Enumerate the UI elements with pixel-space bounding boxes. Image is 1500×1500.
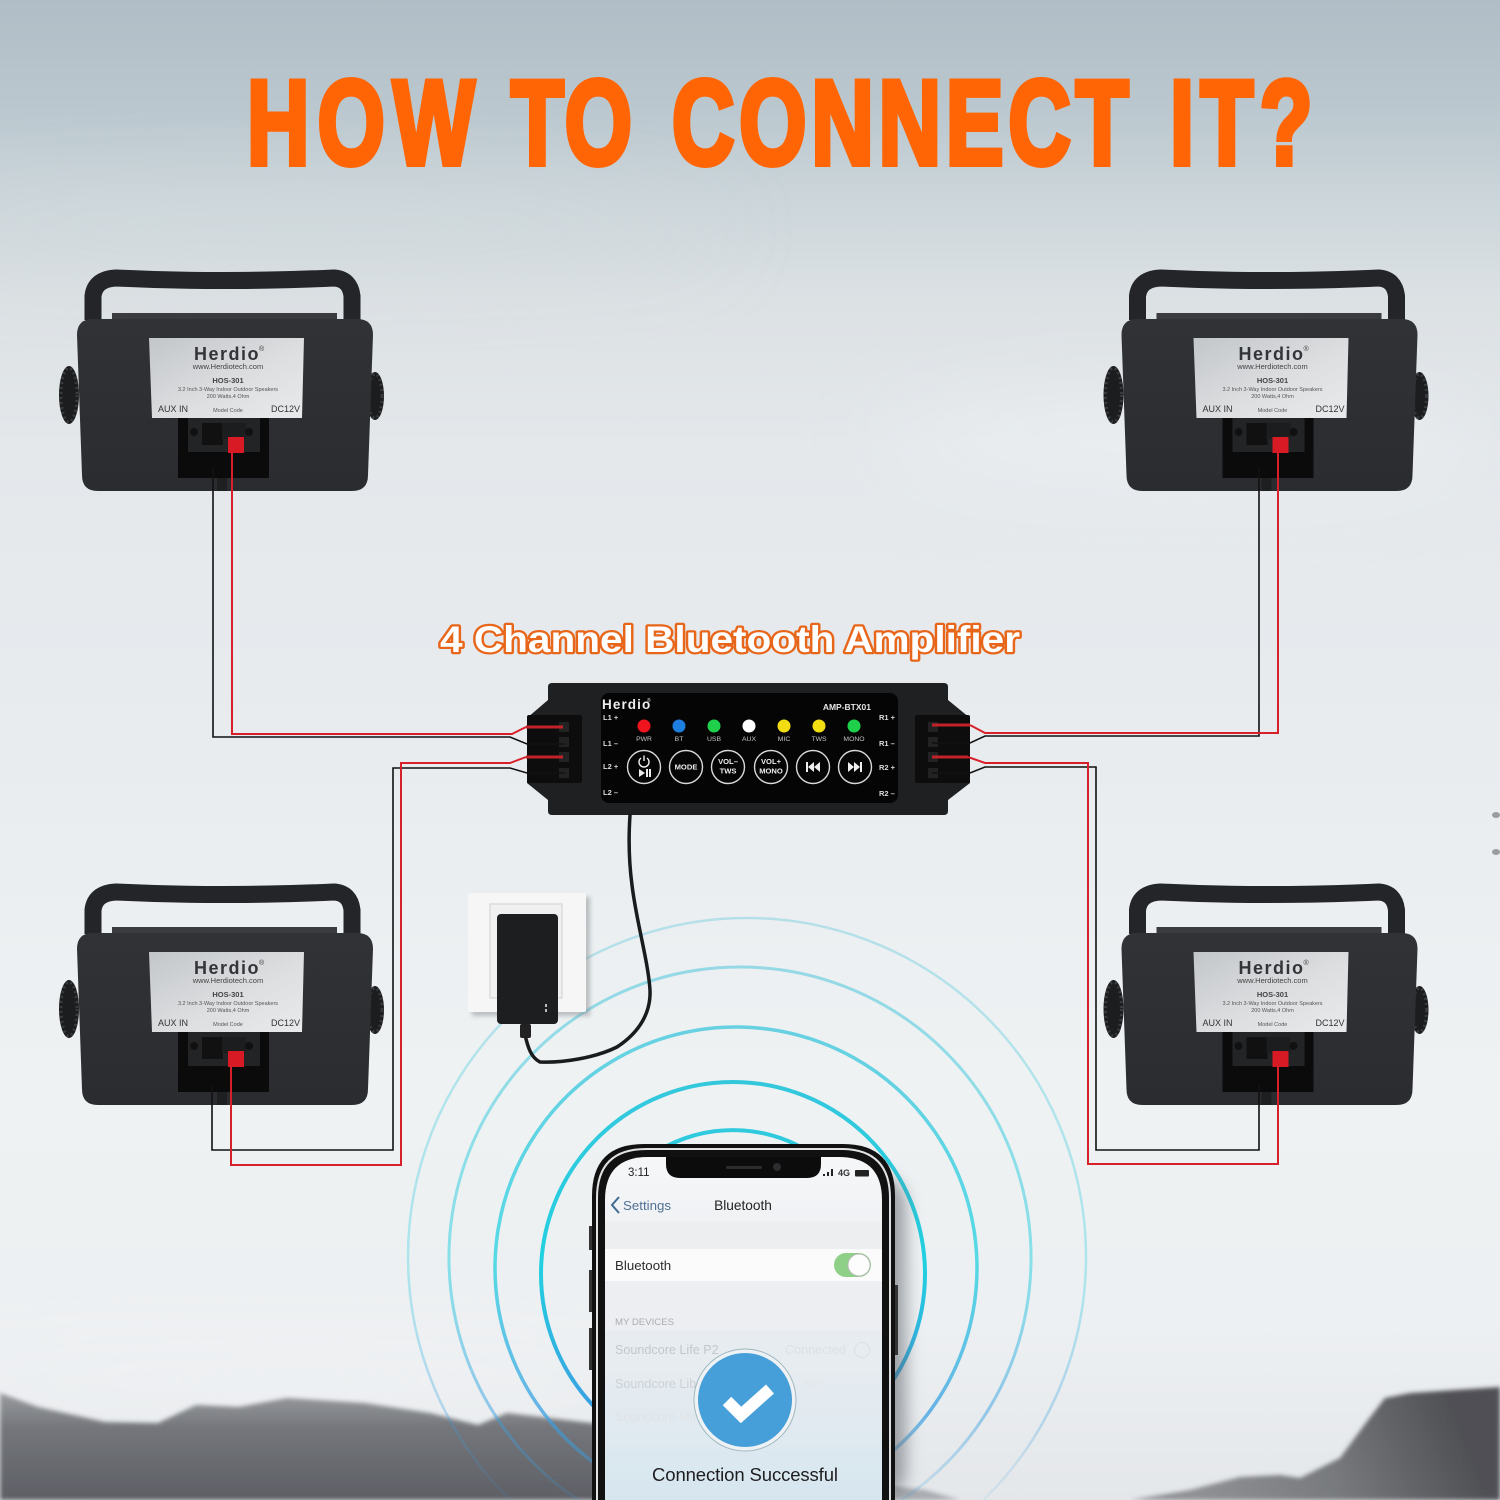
control panel: L2 –: [603, 788, 618, 797]
speaker: top left: HOS-301: [212, 376, 244, 385]
control panel: R1 +: [879, 713, 896, 722]
speaker: bottom right: www.Herdiotech.com: [1236, 976, 1308, 985]
control panel: L2 +: [603, 762, 619, 771]
device list: Connected: [785, 1343, 846, 1357]
speaker: top left: [59, 278, 384, 491]
phone screen content: [605, 1157, 882, 1424]
bluetooth signal rings: [408, 918, 1086, 1500]
speaker: top left: 200 Watts,4 Ohm: [207, 394, 250, 400]
LED labels: TWS: [811, 736, 827, 743]
power adapter: [497, 914, 558, 1038]
amplifier label: 4 Channel Bluetooth Amplifier: [440, 619, 1020, 660]
speaker: bottom right: 3.2 Inch 3-Way Indoor Outdoor Speakers: [1222, 1001, 1323, 1007]
phone screen: [605, 1157, 882, 1500]
control panel: L1 +: [603, 713, 619, 722]
speaker: top left: Herdio: [194, 344, 260, 364]
speaker wires: bottom left: [212, 757, 565, 1165]
control panel: R2 +: [879, 763, 896, 772]
bluetooth row: Bluetooth: [615, 1258, 671, 1273]
left connector block: [527, 715, 582, 783]
power cord: [524, 815, 650, 1062]
button captions: VOL–: [718, 757, 738, 766]
phone frame: [592, 1144, 895, 1500]
device list: Soundcore Liberty: [615, 1377, 718, 1391]
LED labels: PWR: [636, 736, 652, 743]
title: HOW: [247, 56, 475, 190]
speaker: bottom left: www.Herdiotech.com: [192, 976, 263, 985]
LED labels: [636, 736, 865, 743]
speaker: bottom right: HOS-301: [1257, 990, 1288, 999]
device list: [615, 1317, 870, 1424]
speaker: bottom left: ®: [259, 959, 265, 967]
speaker: top left: DC12V: [271, 404, 300, 414]
speaker wires: top right: [932, 452, 1278, 743]
control panel: ®: [647, 697, 651, 704]
right connector block: [915, 715, 970, 783]
speaker: bottom left: AUX IN: [158, 1018, 188, 1028]
connection successful badge: [694, 1349, 796, 1451]
title: [247, 56, 1313, 190]
speaker: top left: AUX IN: [158, 404, 188, 414]
speaker: top right: www.Herdiotech.com: [1236, 362, 1308, 371]
speaker: bottom right: DC12V: [1316, 1018, 1345, 1028]
button captions: MONO: [759, 766, 783, 776]
speaker: bottom right: Herdio: [1238, 958, 1305, 978]
device list: MY DEVICES: [615, 1317, 674, 1328]
control buttons: [628, 750, 872, 784]
speaker: bottom left: Model Code: [213, 1022, 243, 1028]
speaker: top right: AUX IN: [1202, 404, 1233, 414]
background cloud haze: [0, 200, 1480, 1410]
speaker: top right: Model Code: [1258, 408, 1287, 414]
LED labels: MIC: [778, 736, 790, 743]
control panel: Herdio: [602, 697, 651, 712]
speaker: bottom right: 200 Watts,4 Ohm: [1251, 1008, 1294, 1014]
LED labels: USB: [707, 736, 721, 743]
phone shadow: [640, 1175, 906, 1500]
control panel: [601, 693, 898, 803]
speaker: bottom right: [1104, 892, 1428, 1105]
status bar: [628, 1168, 869, 1176]
control panel: R2 –: [879, 789, 895, 798]
speaker: bottom left: DC12V: [271, 1018, 300, 1028]
status bar: 4G: [838, 1168, 850, 1178]
title: IT?: [1170, 56, 1313, 190]
left mountains: [0, 1393, 600, 1500]
bluetooth row: [615, 1253, 871, 1277]
speaker: top left: ®: [259, 345, 265, 353]
device list: Soundcore Life P2: [615, 1343, 719, 1357]
LED labels: BT: [675, 736, 683, 743]
speaker: bottom left: Herdio: [194, 958, 260, 978]
control panel: AMP-BTX01: [823, 702, 871, 712]
notch: [666, 1157, 821, 1178]
speaker: top right: 3.2 Inch 3-Way Indoor Outdoor Speakers: [1222, 387, 1323, 393]
speaker: bottom right: Model Code: [1258, 1022, 1287, 1028]
amplifier: [527, 683, 970, 815]
speaker: top right: 200 Watts,4 Ohm: [1251, 394, 1294, 400]
control panel: R1 –: [879, 739, 895, 748]
button captions: [675, 757, 783, 776]
speaker: bottom left: 200 Watts,4 Ohm: [207, 1008, 250, 1014]
device list: Soundcore Mini: [615, 1410, 703, 1424]
navigation bar: Settings: [623, 1198, 671, 1213]
navigation bar: [612, 1197, 772, 1213]
phone side buttons: [589, 1226, 898, 1370]
control panel: L1 –: [603, 739, 618, 748]
LED labels: MONO: [843, 736, 865, 743]
speaker: top right: DC12V: [1316, 404, 1345, 414]
speaker: top right: [1104, 278, 1428, 491]
amplifier housing: [527, 683, 970, 815]
speaker wires: top left: [213, 452, 565, 744]
status bar: 3:11: [628, 1167, 650, 1179]
power and play icon: [639, 756, 651, 777]
speaker: top left: 3.2 Inch 3-Way Indoor Outdoor Speakers: [178, 387, 278, 393]
button captions: MODE: [675, 762, 697, 772]
title: TO: [511, 56, 632, 190]
speaker: top right: Herdio: [1238, 344, 1305, 364]
speaker: bottom right: AUX IN: [1202, 1018, 1233, 1028]
small mountain behind phone: [893, 1486, 960, 1500]
next icon: [848, 762, 862, 772]
speaker: top left: www.Herdiotech.com: [192, 362, 263, 371]
speaker: top right: HOS-301: [1257, 376, 1288, 385]
LED labels: AUX: [742, 736, 756, 743]
smartphone: [589, 1144, 898, 1500]
button captions: VOL+: [761, 757, 782, 766]
right mountains: [1130, 1387, 1500, 1500]
wall socket: [468, 893, 590, 1016]
speaker: top left: Model Code: [213, 408, 243, 414]
speaker: bottom left: 3.2 Inch 3-Way Indoor Outdoor Speakers: [178, 1001, 278, 1007]
button captions: TWS: [720, 766, 736, 776]
speaker: top right: ®: [1304, 345, 1310, 353]
navigation bar: Bluetooth: [714, 1198, 772, 1213]
speaker: bottom left: HOS-301: [212, 990, 244, 999]
connection successful text: Connection Successful: [652, 1464, 838, 1485]
distant tree specks: [1492, 812, 1500, 855]
speaker: bottom left: [59, 892, 384, 1105]
speaker: bottom right: ®: [1304, 959, 1310, 967]
previous icon: [806, 762, 820, 772]
indicator LEDs: [638, 720, 860, 732]
device list: Not: [804, 1377, 824, 1391]
title: CONNECT: [672, 56, 1128, 190]
speaker wires: bottom right: [932, 757, 1278, 1164]
